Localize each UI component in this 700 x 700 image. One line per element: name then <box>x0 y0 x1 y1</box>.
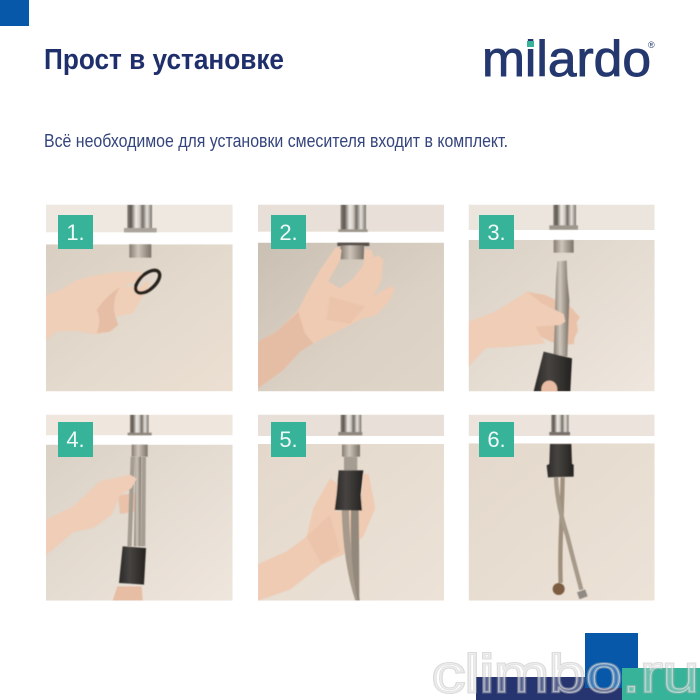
panel: step 5 photo <box>258 415 444 601</box>
badge 6 <box>479 422 514 457</box>
corner square top-left <box>0 0 29 26</box>
panel: step 3 photo <box>469 205 655 398</box>
corner block: navy <box>476 677 622 700</box>
corner block: teal <box>622 668 700 700</box>
badge 5: 5. <box>279 427 298 452</box>
badge 2: 2. <box>279 220 298 245</box>
faucet <box>337 205 369 259</box>
hand and tubes with nut <box>46 457 146 601</box>
faucet <box>549 205 578 253</box>
title: Прост в установке <box>44 44 284 76</box>
badge 3 <box>479 215 514 249</box>
hand holding ring <box>46 266 164 340</box>
faucet and fixture <box>338 415 362 471</box>
badge 4 <box>58 422 93 457</box>
hand, black nut and hoses <box>258 470 375 601</box>
logo: milardo: ® <box>648 40 655 50</box>
panel: step 1 photo <box>46 205 233 391</box>
panel: step 6 photo <box>469 415 655 601</box>
corner block: blue <box>585 633 638 688</box>
badge 1: 1. <box>66 220 85 245</box>
panel: step 2 photo <box>258 205 444 391</box>
subtitle: Всё необходимое для установки смесителя входит в комплект. <box>44 131 508 151</box>
faucet <box>124 205 157 258</box>
badge 5 <box>271 422 306 457</box>
logo: milardo: milardo <box>482 31 651 87</box>
badge 4: 4. <box>66 427 85 452</box>
mounted nut and crossed hoses <box>547 444 588 599</box>
badge 2 <box>271 215 306 249</box>
faucet <box>549 415 570 435</box>
faucet and fixture <box>128 415 152 457</box>
badge 3: 3. <box>487 220 506 245</box>
hand reaching to nut <box>258 247 395 388</box>
hose tube, grip and fingers <box>469 261 580 398</box>
badge 1 <box>58 215 93 249</box>
badge 6: 6. <box>487 427 506 452</box>
panel: step 4 photo <box>46 415 233 601</box>
